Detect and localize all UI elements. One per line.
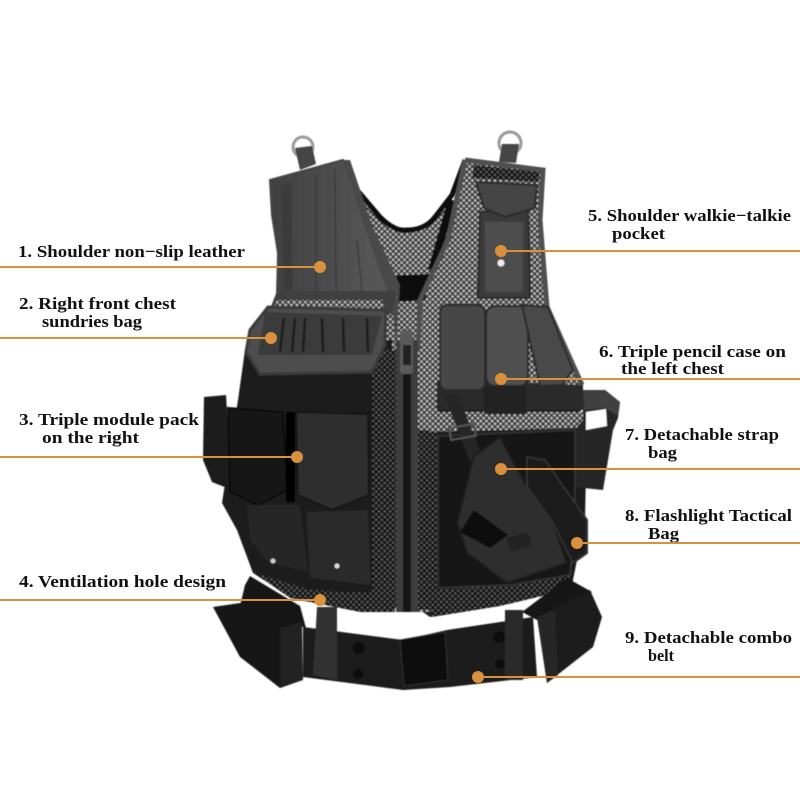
callout 9: detachable combo belt <box>472 628 800 683</box>
callout 8: flashlight tactical bag <box>571 506 800 549</box>
callout 4: ventilation hole design <box>0 572 326 606</box>
black inner label <box>385 274 430 302</box>
vertical straps <box>313 607 337 680</box>
lower right velcro panel <box>438 430 575 588</box>
callout 5: shoulder walkie-talkie pocket: 5. Shoulder walkie−talkie <box>588 206 791 225</box>
right shoulder trim <box>418 160 582 385</box>
callout 3: triple module pack: on the right <box>42 428 139 447</box>
right top edge dark mesh <box>472 165 540 182</box>
pocket 2: right chest sundries bag <box>246 307 386 430</box>
callout 8: flashlight tactical bag: Bag <box>648 524 680 543</box>
callout 4: ventilation hole design: 4. Ventilation hole design <box>19 572 227 591</box>
icon: right D-ring <box>499 132 521 163</box>
belt left pouch flap <box>280 622 303 688</box>
pocket 5: walkie-talkie <box>476 182 537 298</box>
callout 5: shoulder walkie-talkie pocket <box>495 206 800 257</box>
left side flap, part of triple module pack <box>203 395 371 585</box>
callout 9: detachable combo belt: 9. Detachable combo <box>625 628 792 647</box>
right lower torso <box>420 340 586 617</box>
back mesh neck <box>357 190 452 350</box>
belt side straps <box>240 576 592 628</box>
holster <box>457 437 567 583</box>
callout 2: right front chest sundries bag: 2. Right front chest <box>19 294 176 313</box>
callout 5: shoulder walkie-talkie pocket: pocket <box>612 224 665 243</box>
black neck band <box>345 160 465 230</box>
dark strap under collar <box>358 195 452 275</box>
main lower torso <box>222 340 392 610</box>
left chest mesh <box>272 300 384 312</box>
flashlight pouch <box>527 457 587 563</box>
pocket 6: triple pencil case <box>437 305 583 414</box>
zipper <box>396 330 418 612</box>
module flap 2 <box>296 412 369 510</box>
callout 8: flashlight tactical bag: 8. Flashlight Tactical <box>625 506 792 525</box>
module lower body 2 <box>306 510 371 585</box>
left upper strip <box>268 291 396 314</box>
callout 7: detachable strap bag <box>495 425 800 475</box>
shoulder inner seams <box>291 170 362 292</box>
belt right pouch <box>537 590 602 683</box>
callout 2: right front chest sundries bag <box>0 294 277 344</box>
lower mesh band left <box>253 572 395 612</box>
belt left pouch <box>213 603 302 688</box>
right strip band mesh <box>430 412 583 432</box>
callout 3: triple module pack <box>0 410 303 463</box>
callout 3: triple module pack: 3. Triple module pack <box>19 410 200 429</box>
callout 1: shoulder non-slip leather <box>0 242 326 273</box>
callout 7: detachable strap bag: 7. Detachable strap <box>625 425 779 444</box>
shoulder collar trim <box>343 160 400 345</box>
detachable strap <box>444 395 480 462</box>
left shoulder panel <box>270 160 396 295</box>
snaps <box>353 642 365 654</box>
icon: left D-ring <box>293 137 316 170</box>
callout 7: detachable strap bag: bag <box>648 443 678 462</box>
belt <box>213 576 602 690</box>
right side pouch <box>573 390 620 490</box>
callout 1: shoulder non-slip leather: 1. Shoulder non−slip leather <box>18 242 245 261</box>
buckle <box>400 632 448 686</box>
module flap 1 <box>228 408 287 505</box>
centre mesh strips <box>372 350 438 612</box>
vest illustration <box>203 132 620 690</box>
right shoulder mesh panel <box>420 160 582 385</box>
callout 2: right front chest sundries bag: sundries bag <box>42 312 143 331</box>
callout 9: detachable combo belt: belt <box>648 646 674 665</box>
callout 6: triple pencil case: 6. Triple pencil case on <box>599 342 787 361</box>
belt right pouch flap <box>537 610 558 683</box>
zipper pull <box>403 345 411 365</box>
lower mesh band right <box>430 572 570 617</box>
callout 6: triple pencil case: the left chest <box>621 359 724 378</box>
belt band <box>303 617 537 690</box>
shoulder inner strip <box>281 184 293 290</box>
module lower body 1 <box>247 505 308 572</box>
callout 6: triple pencil case <box>495 342 800 385</box>
